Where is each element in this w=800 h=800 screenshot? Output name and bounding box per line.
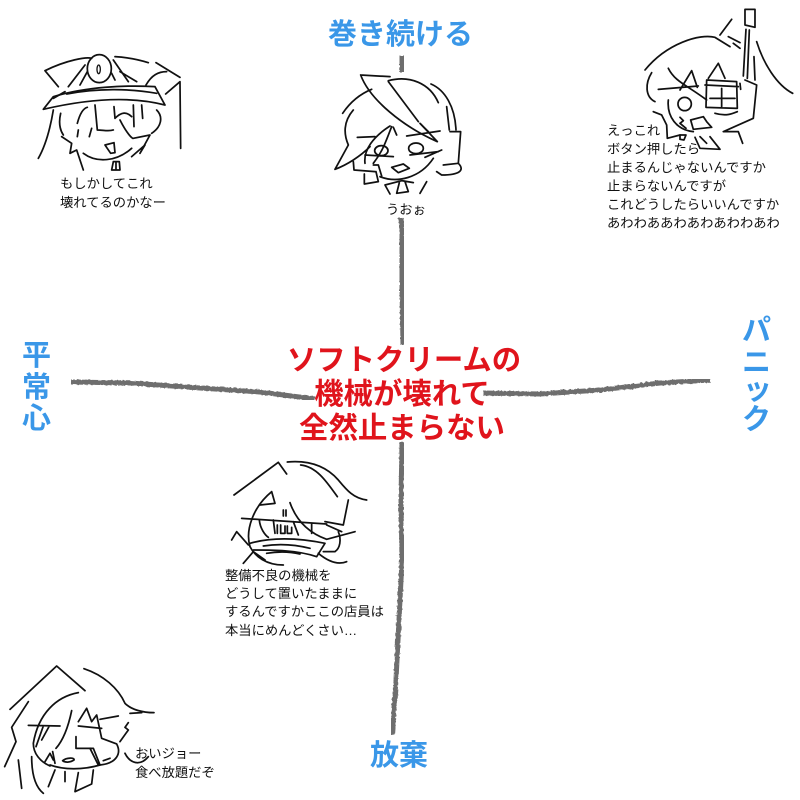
speech: top right: 止まるんじゃないんですか: [607, 160, 766, 175]
axis label: left: 平: [22, 340, 51, 372]
vertical axis: [392, 56, 403, 735]
speech: lower center: [225, 568, 384, 638]
speech: lower center: 本当にめんどくさい…: [225, 623, 357, 638]
axis label: left: 心: [22, 402, 51, 435]
speech: top left: もしかしてこれ: [60, 176, 153, 191]
speech: top right: [607, 123, 780, 230]
central title: 全然止まらない: [299, 412, 505, 445]
speech: top right: これどうしたらいいんですか: [607, 197, 779, 212]
axis label: top: 巻き続ける: [328, 18, 473, 51]
speech: top left: [60, 176, 166, 210]
axis label: bottom: 放棄: [370, 739, 428, 772]
axis label: left: [22, 340, 51, 435]
central title: 機械が壊れて: [314, 377, 490, 411]
speech: bottom left: おいジョー: [135, 746, 201, 761]
axis label: right: ニ: [742, 347, 771, 379]
character: top center: [335, 75, 461, 194]
character: bottom left: [5, 666, 154, 793]
speech: top center: うおぉ: [386, 202, 426, 217]
axis label: right: パ: [742, 315, 771, 347]
speech: lower center: するんですかここの店員は: [225, 604, 384, 619]
character: lower center: [232, 462, 367, 565]
speech: top right: あわわああわあわあわわあわ: [607, 216, 780, 230]
speech: top right: えっこれ: [607, 123, 660, 138]
speech: top right: 止まらないんですが: [607, 178, 726, 194]
axis label: right: [742, 315, 772, 436]
character: top left with headlamp helmet: [38, 55, 181, 170]
speech: lower center: どうして置いたままに: [225, 586, 357, 601]
speech: top right: ボタン押したら: [607, 142, 700, 156]
axis label: right: ク: [742, 404, 771, 436]
axis label: right: ッ: [743, 374, 772, 406]
central title: [287, 344, 521, 445]
character: top right with lever: [645, 9, 793, 149]
axis label: left: 常: [22, 371, 51, 404]
central title: ソフトクリームの: [287, 344, 521, 377]
speech: bottom left: 食べ放題だぞ: [135, 765, 215, 780]
horizontal axis: [71, 380, 710, 399]
speech: lower center: 整備不良の機械を: [225, 568, 331, 583]
speech: bottom left: [135, 746, 215, 780]
speech: top left: 壊れてるのかなー: [60, 195, 166, 210]
